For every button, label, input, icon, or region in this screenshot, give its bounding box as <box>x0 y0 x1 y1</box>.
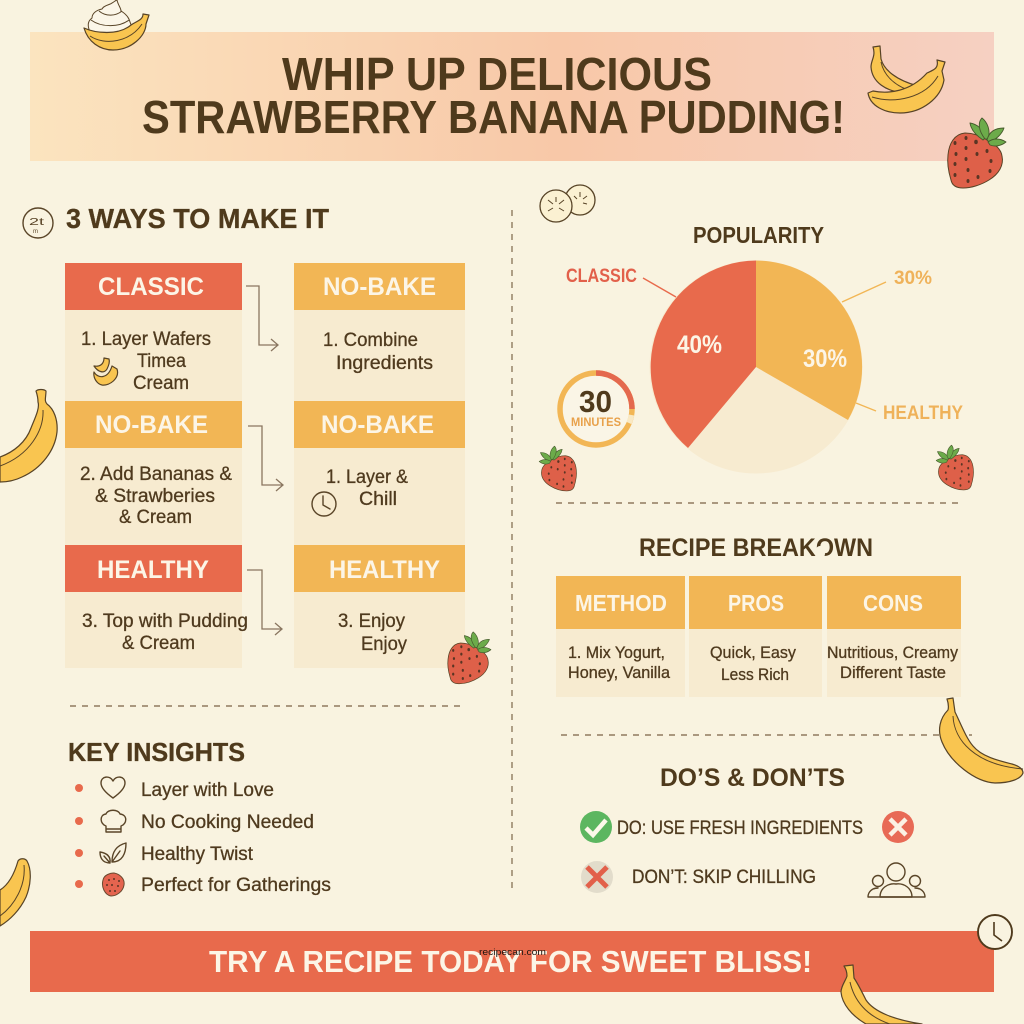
label: classic: CLASSIC <box>566 266 637 287</box>
do item: DO: USE FRESH INGREDIENTS <box>617 818 863 839</box>
icon: group of people <box>868 863 925 897</box>
label: 30%: 30% <box>894 268 932 289</box>
panel: key insights <box>68 737 331 896</box>
icon: time badge: 2t <box>29 217 44 228</box>
column: pros: PROS <box>728 590 784 616</box>
arrow: classic to no-bake <box>246 286 278 351</box>
column: cons: Nutritious, Creamy <box>827 644 959 662</box>
panel: no-bake card right: NO-BAKE <box>321 411 434 439</box>
panel: healthy card right <box>294 545 465 668</box>
panel: no-bake card right: Chill <box>359 489 397 510</box>
insight: perfect for gatherings: Perfect for Gatherings <box>141 875 331 896</box>
panel: classic card: Cream <box>133 373 189 394</box>
footer call to action <box>30 931 994 992</box>
title: WHIP UP DELICIOUS <box>282 48 712 100</box>
table: recipe breakdown <box>556 576 961 697</box>
panel: no-bake card top right: NO-BAKE <box>323 273 436 301</box>
icon: banana left bottom <box>0 859 30 926</box>
arrow: no-bake to no-bake <box>248 426 283 491</box>
panel: healthy card left <box>65 545 248 668</box>
icon: clock bottom right <box>978 915 1012 949</box>
don't item: DON’T: SKIP CHILLING <box>632 867 816 888</box>
column: cons: CONS <box>863 590 923 616</box>
do item <box>580 811 863 843</box>
panel: classic card <box>65 263 242 401</box>
icon: banana bottom <box>841 965 922 1024</box>
heading: recipe breakdown: RECIPE BREAKOWN <box>639 534 873 562</box>
panel: no-bake card left: 2. Add Bananas & <box>80 464 232 485</box>
icon: banana slices <box>540 185 595 222</box>
icon: clock <box>312 492 336 516</box>
icon: strawberry top right <box>948 118 1006 188</box>
panel: no-bake card left: & Strawberies <box>95 486 215 507</box>
icon: strawberry right of pie <box>936 445 974 490</box>
column: pros: Quick, Easy <box>710 644 797 662</box>
insight: no cooking needed <box>75 810 314 833</box>
insight: layer with love: Layer with Love <box>141 780 274 801</box>
panel: no-bake card right <box>294 401 465 545</box>
panel: healthy card right: HEALTHY <box>329 556 440 584</box>
column: cons <box>827 576 961 682</box>
icon: pair of bananas <box>868 46 945 113</box>
panel: no-bake card left: & Cream <box>119 507 192 528</box>
pie chart: popularity <box>566 260 963 474</box>
arrow: healthy to healthy <box>247 570 282 635</box>
timer: 30 minutes <box>560 373 632 445</box>
icon: banana right edge <box>940 698 1023 783</box>
dashed vertical divider <box>511 210 513 892</box>
icon: time badge <box>23 208 53 238</box>
column: method: 1. Mix Yogurt, <box>568 644 665 662</box>
insight: healthy twist: Healthy Twist <box>141 844 254 865</box>
icon: banana bunch <box>94 358 118 385</box>
column: cons: Different Taste <box>840 664 946 682</box>
heading: 3 ways: 3 WAYS TO MAKE IT <box>66 203 329 234</box>
pie chart: popularity: 30% <box>803 345 847 373</box>
icon: banana with whipped cream <box>84 0 149 50</box>
icon: strawberry left of pie <box>539 446 577 491</box>
insight: perfect for gatherings <box>75 873 331 896</box>
column: method: Honey, Vanilla <box>568 664 671 682</box>
panel: classic card: CLASSIC <box>98 273 204 301</box>
panel: healthy card right: Enjoy <box>361 634 407 655</box>
icon: banana left edge <box>0 390 57 482</box>
heading: popularity: POPULARITY <box>693 222 824 248</box>
panel: no-bake card right: 1. Layer & <box>326 467 408 488</box>
panel: classic card: 1. Layer Wafers <box>81 329 211 350</box>
don't item <box>581 861 816 893</box>
panel: healthy card left: 3. Top with Pudding <box>82 611 248 632</box>
watermark: recipecan.com <box>479 947 546 958</box>
panel: no-bake card top right: 1. Combine <box>323 330 418 351</box>
panel: no-bake card top right: Ingredients <box>336 353 433 374</box>
panel: classic card: Timea <box>137 351 186 372</box>
icon: strawberry by cards <box>448 632 491 684</box>
icon: red cross <box>882 811 914 843</box>
insight: healthy twist <box>75 843 254 865</box>
panel: no-bake card left: NO-BAKE <box>95 411 208 439</box>
icon: time badge: m <box>33 229 38 235</box>
timer: 30 minutes: MINUTES <box>571 417 621 429</box>
footer call to action: TRY A RECIPE TODAY FOR SWEET BLISS! <box>209 944 812 979</box>
insight: no cooking needed: No Cooking Needed <box>141 812 314 833</box>
panel: healthy card left: HEALTHY <box>97 556 209 584</box>
panel: no-bake card left <box>65 401 242 545</box>
column: method: METHOD <box>575 590 667 616</box>
column: pros: Less Rich <box>721 666 789 684</box>
panel: do's and don'ts <box>580 764 925 897</box>
insight: layer with love <box>75 777 274 801</box>
title banner <box>30 32 994 161</box>
pie chart: popularity: 40% <box>677 331 722 359</box>
column: method <box>556 576 685 682</box>
label: healthy: HEALTHY <box>883 403 963 424</box>
heading: do's and don'ts: DO’S & DON’TS <box>660 764 845 792</box>
title banner: STRAWBERRY BANANA PUDDING! <box>142 91 845 143</box>
panel: no-bake card top right <box>294 263 465 401</box>
heading: key insights: KEY INSIGHTS <box>68 737 245 767</box>
panel: healthy card right: 3. Enjoy <box>338 611 405 632</box>
timer: 30 minutes: 30 <box>579 384 612 419</box>
column: pros <box>689 576 822 684</box>
panel: healthy card left: & Cream <box>122 633 195 654</box>
